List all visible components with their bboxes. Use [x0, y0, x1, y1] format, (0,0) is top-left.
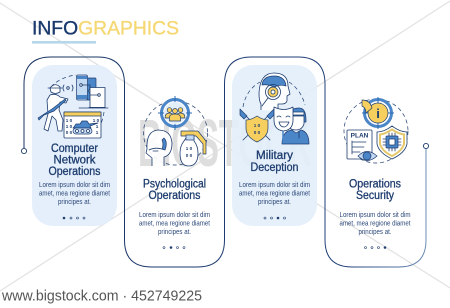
progress dots: [163, 246, 185, 248]
step 3: military deception: [239, 73, 310, 219]
body text: Lorem ipsum dolor sit dim: [340, 212, 411, 219]
icon: target, plan document, eye and shield: PLAN: [351, 132, 369, 140]
heading: Network: [54, 154, 96, 166]
progress dots: [63, 217, 85, 219]
panel: background 1: [32, 65, 117, 226]
icon: target, head and grenade: [144, 96, 208, 166]
body text: Lorem ipsum dolor sit dim: [39, 182, 110, 189]
body text: amet, mea regione diamet: [239, 190, 310, 198]
body text: principes at.: [258, 199, 291, 206]
heading: Military: [256, 150, 293, 162]
icon: soldier with devices and tank screen: 1 0: [93, 118, 100, 123]
body text: [39, 182, 110, 206]
body text: principes at.: [58, 199, 91, 206]
end node: [423, 143, 429, 149]
body text: amet, mea regione diamet: [39, 190, 110, 198]
start node: [21, 148, 27, 154]
heading: Security: [356, 190, 394, 202]
body text: principes at.: [158, 229, 191, 236]
icon: soldier with devices and tank screen: 1 0: [66, 118, 73, 123]
body text: amet, mea regione diamet: [340, 220, 411, 228]
step 4: operations security: [340, 97, 411, 248]
icon: target, head and grenade: 1 0: [186, 146, 193, 151]
icon: target, plan document, eye and shield: [344, 97, 408, 163]
heading: Computer: [51, 143, 98, 155]
body text: [139, 212, 210, 236]
heading: Psychological: [143, 178, 206, 190]
icon: soldier with devices and tank screen: [38, 75, 108, 138]
body text: amet, mea regione diamet: [139, 220, 210, 228]
icon: brain head, shield, mask and officer: [240, 73, 309, 144]
heading: Deception: [250, 162, 298, 174]
body text: Lorem ipsum dolor sit dim: [139, 212, 210, 219]
icon: soldier with devices and tank screen: 1: [96, 124, 99, 129]
icon: soldier with devices and tank screen: 1 0: [66, 124, 73, 129]
heading: [349, 178, 401, 202]
heading: Operations: [148, 190, 201, 202]
title underline: [32, 41, 96, 44]
heading: Operations: [349, 178, 401, 190]
body text: [340, 212, 411, 236]
icon: soldier with devices and tank screen: 1: [96, 130, 99, 135]
watermark footer text: www.bigstock.com · 452749225: [1, 288, 202, 304]
icon: brain head, shield, mask and officer: 1 0: [254, 123, 261, 128]
heading: Operations: [48, 166, 101, 178]
snake outline connector: [21, 57, 429, 267]
icon: brain head, shield, mask and officer: 0 0: [254, 130, 261, 135]
heading: [250, 150, 298, 174]
heading: [48, 143, 101, 178]
icon: target, plan document, eye and shield: i: [376, 106, 380, 121]
step 2: psychological operations: [139, 96, 210, 248]
body text: Lorem ipsum dolor sit dim: [239, 182, 310, 189]
title: INFOGRAPHICS: [32, 18, 179, 40]
body text: principes at.: [358, 229, 392, 236]
progress dots: [264, 217, 286, 219]
icon: soldier with devices and tank screen: 0 0: [66, 130, 73, 135]
body text: [239, 182, 310, 206]
heading: [143, 178, 206, 202]
progress dots: [364, 246, 386, 248]
step 1: computer network operations: [38, 75, 110, 219]
panel: background 3: [232, 65, 317, 226]
icon: target, head and grenade: 0 0: [186, 153, 193, 158]
